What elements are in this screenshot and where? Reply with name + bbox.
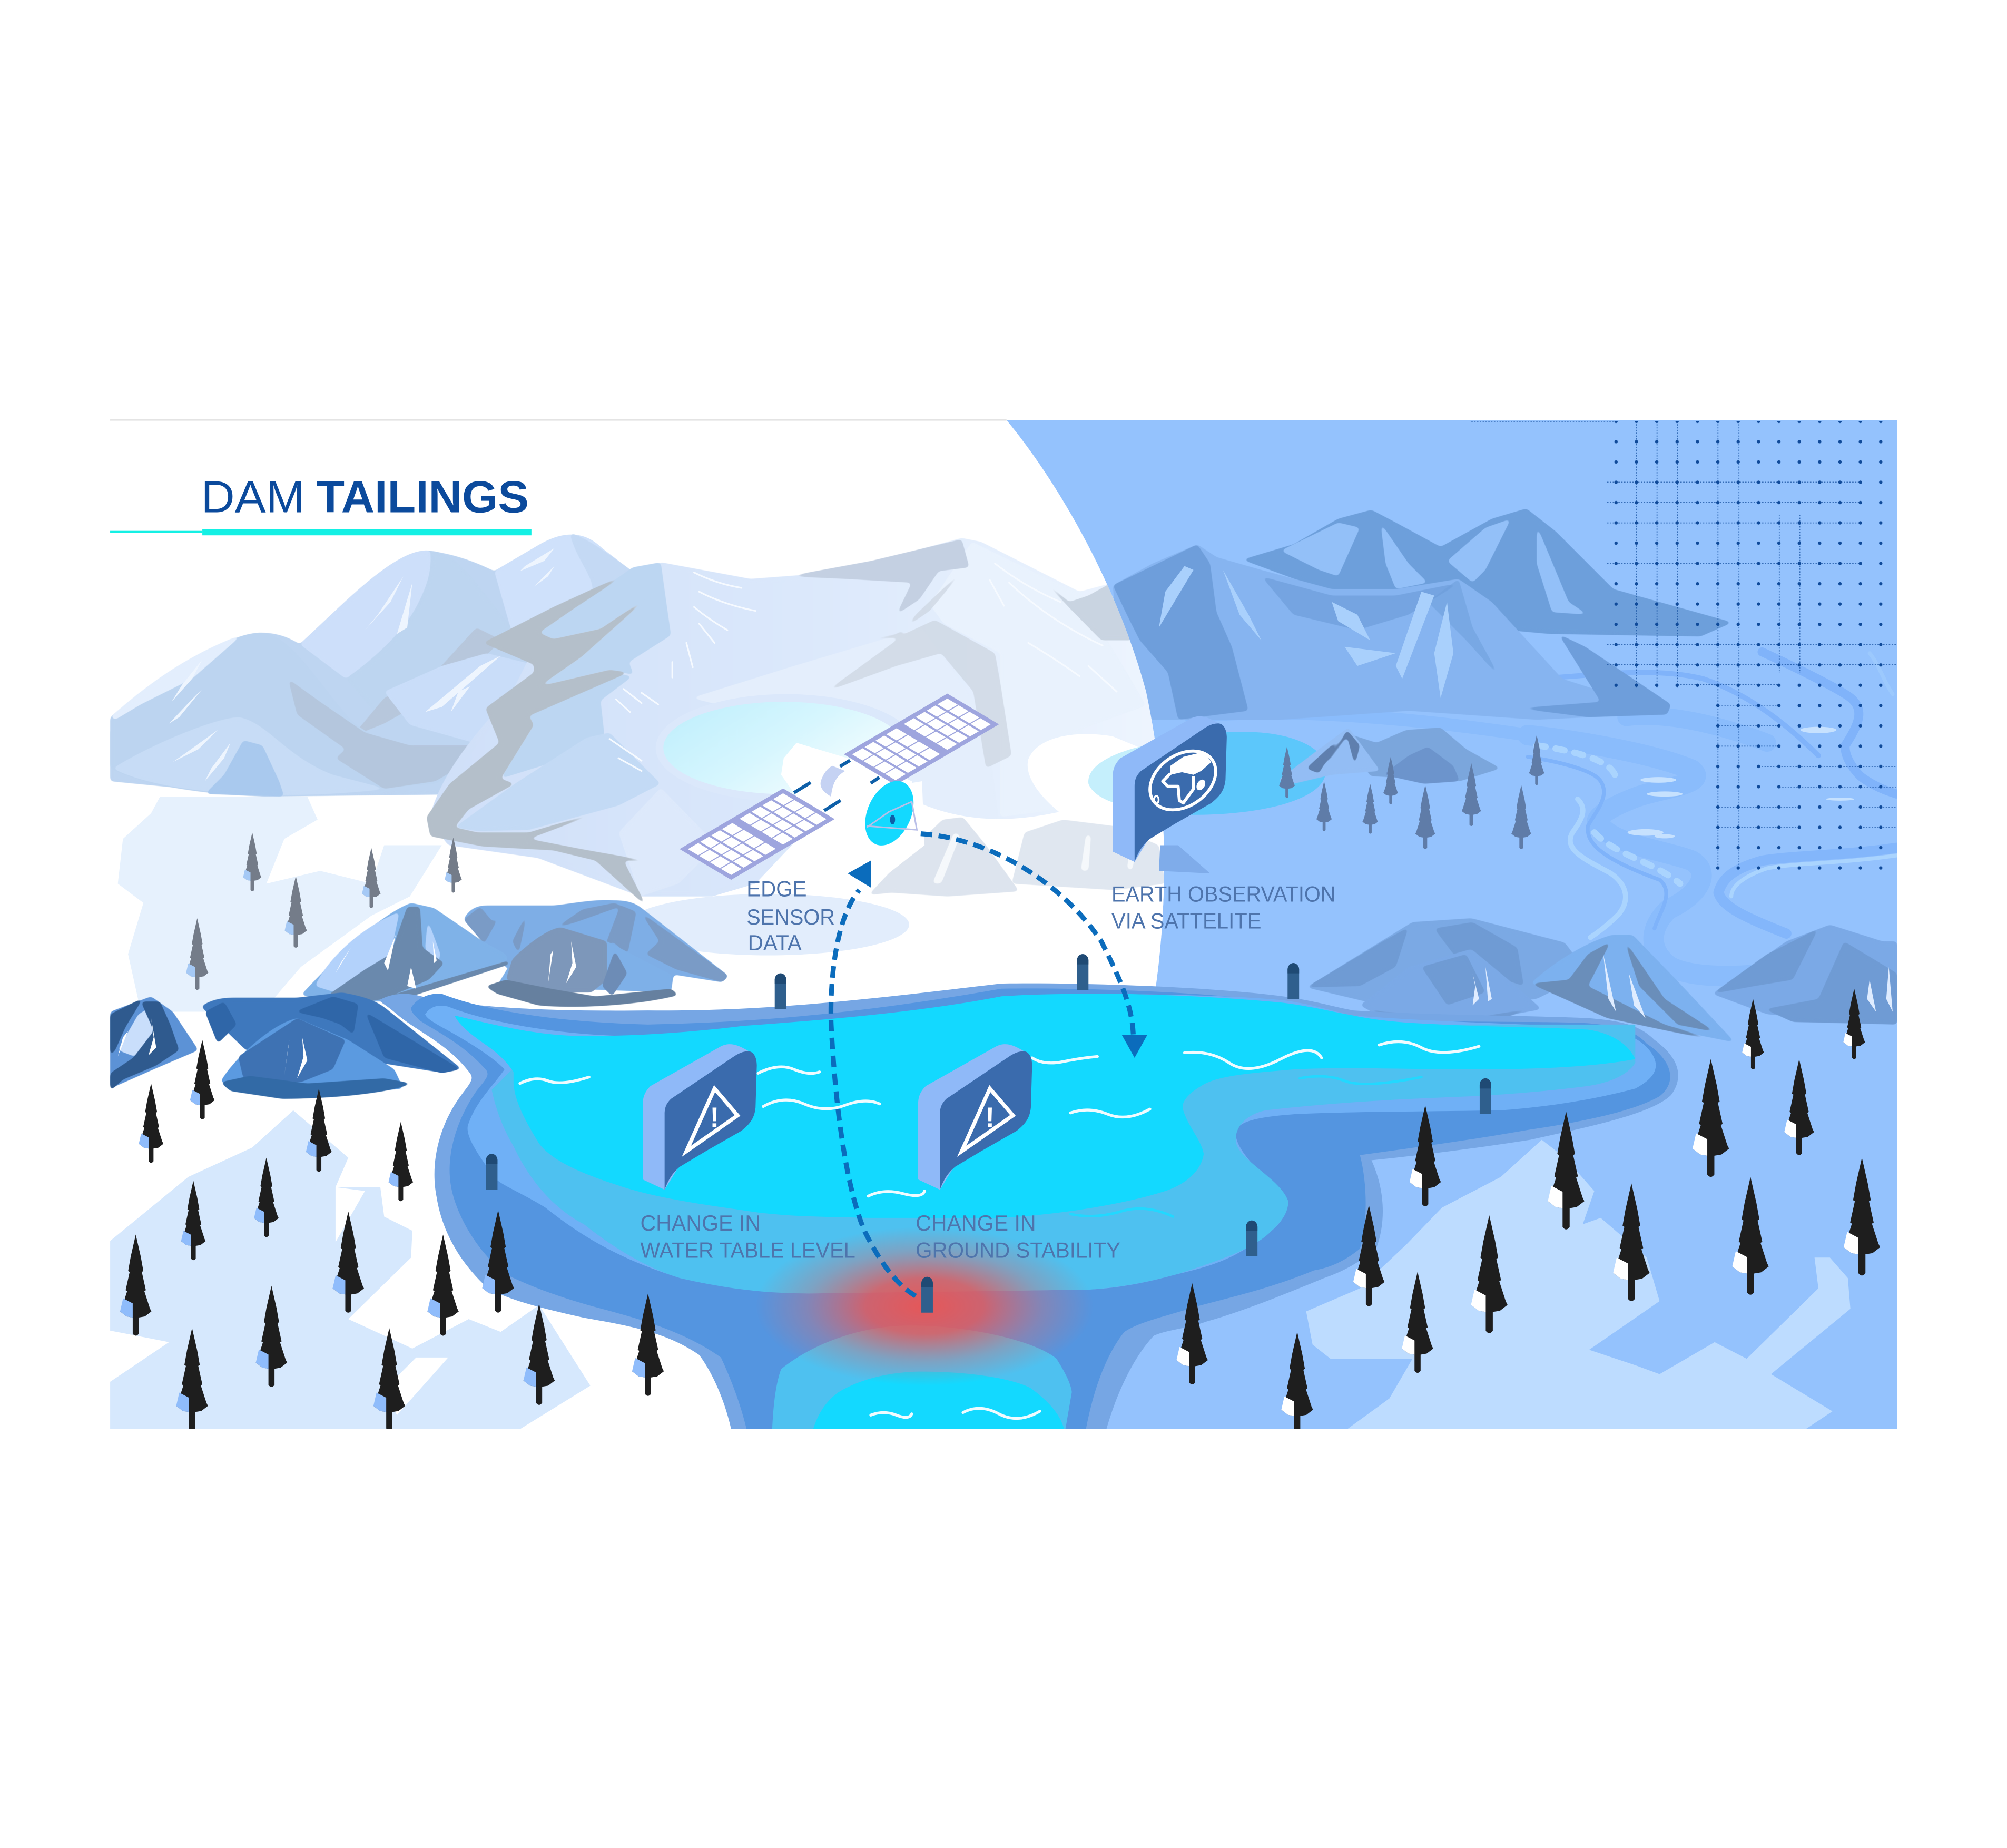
- sensors: [486, 954, 1491, 1313]
- panel struts: [794, 760, 879, 811]
- distant peaks by pond: [1277, 728, 1501, 784]
- shallows: [491, 1025, 1635, 1293]
- label: edge sensor data: EDGE: [746, 877, 806, 901]
- trees faded by earth observation pond: [1279, 735, 1544, 849]
- small dark mountain behind label: [1159, 845, 1210, 873]
- middle peak: [300, 551, 431, 679]
- gray patch ridge: [788, 539, 969, 615]
- rivers right: [1191, 652, 1896, 976]
- upper right mountains: [1113, 508, 1733, 720]
- solar panel left: [680, 789, 834, 880]
- label: earth observation via satellite: [1111, 882, 1335, 933]
- pond part left of edge: [1088, 743, 1159, 809]
- lower basin water: [813, 1372, 1064, 1429]
- lower basin shallows: [772, 1325, 1072, 1429]
- pin: water table warning: [643, 1044, 757, 1190]
- snow patches left: [110, 797, 591, 1429]
- mountain group left dark: [110, 992, 463, 1099]
- mountain group left faded: [301, 900, 729, 1007]
- warning triangle: [962, 1088, 1013, 1151]
- label: change in ground stability: GROUND STABILITY: [916, 1238, 1120, 1262]
- label: change in water table level: CHANGE IN: [640, 1211, 761, 1235]
- mountain group right: [1306, 918, 1897, 1044]
- label: change in ground stability: CHANGE IN: [916, 1211, 1036, 1235]
- white streaks: [609, 564, 1117, 771]
- label: change in ground stability: [916, 1211, 1120, 1262]
- red seepage glow: [755, 1227, 1094, 1385]
- satellite body: [781, 743, 922, 871]
- dish feed lines: [867, 802, 917, 830]
- pin: earth observation globe: [1113, 716, 1227, 862]
- right blue satellite-view region: [1007, 420, 1897, 1429]
- arrow: sensor data to satellite: [831, 861, 916, 1296]
- pond water: [663, 702, 904, 794]
- warning triangle: [686, 1088, 737, 1151]
- globe icon: [1139, 739, 1227, 822]
- white around pond: [640, 734, 1172, 974]
- label: edge sensor data: [746, 877, 835, 955]
- title: [201, 472, 529, 522]
- waves: [520, 1041, 1479, 1418]
- trees faded upper left: [186, 832, 462, 990]
- right peak gray band: [826, 564, 1011, 769]
- clouds over rivers: [1628, 727, 1854, 838]
- title: DAM: [201, 472, 305, 522]
- tailings pond: [379, 984, 1678, 1429]
- small gray mountains: [868, 817, 1165, 897]
- label: edge sensor data: SENSOR: [746, 905, 835, 929]
- scene illustration: [110, 420, 1897, 1434]
- dam outer band: [379, 984, 1678, 1429]
- front peak: [110, 633, 502, 797]
- top rule: [110, 419, 1007, 421]
- dish: [855, 773, 923, 853]
- dot grid: [1471, 421, 1897, 879]
- label: change in water table level: [640, 1211, 855, 1262]
- gray river left: [427, 573, 661, 907]
- pond rim: [656, 694, 917, 802]
- arrow: satellite to earth observation: [921, 834, 1147, 1058]
- title: TAILINGS: [316, 472, 529, 522]
- slate slope right: [1032, 570, 1133, 641]
- range backing: [110, 535, 635, 797]
- low peak: [113, 717, 387, 795]
- pin: ground stability warning: [918, 1044, 1032, 1190]
- dam middle band: [411, 988, 1670, 1429]
- title underline: [110, 529, 532, 535]
- light lower peak: [384, 653, 534, 744]
- far right peak: [495, 534, 617, 628]
- trees foreground left: [120, 1040, 664, 1430]
- solar panel right: [844, 694, 999, 785]
- central left faces: [539, 562, 671, 686]
- edge sensor ellipse: [627, 894, 909, 956]
- satellite: [680, 694, 999, 880]
- label: earth observation via satellite: EARTH OBSERVATION: [1111, 882, 1335, 906]
- label: edge sensor data: DATA: [748, 931, 802, 955]
- light ground patches right: [1306, 1140, 1851, 1429]
- central right faces: [930, 542, 1146, 817]
- earth observation pond: [1101, 732, 1326, 815]
- label: earth observation via satellite: VIA SATTELITE: [1111, 909, 1261, 933]
- trees foreground right: [1176, 989, 1880, 1434]
- water: [455, 994, 1635, 1218]
- inner bank: [425, 994, 1656, 1293]
- label: change in water table level: WATER TABLE LEVEL: [640, 1238, 855, 1262]
- upper left mountains: [110, 533, 635, 797]
- central mountain: [427, 538, 1172, 974]
- exclamation mark: !: [985, 1102, 995, 1133]
- crescent collar: [821, 766, 845, 797]
- exclamation mark: !: [710, 1102, 719, 1133]
